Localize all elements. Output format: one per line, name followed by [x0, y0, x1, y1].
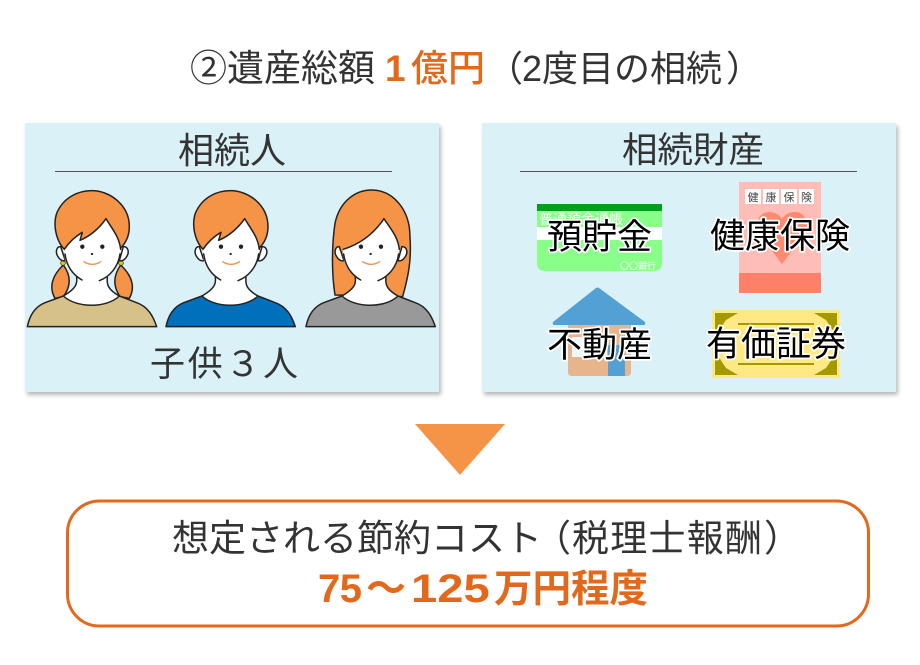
title: 2度目の相続: [522, 48, 722, 89]
icon: health insurance card: 康: [766, 190, 776, 204]
result text: estimated cost: 想定される節約コスト: [172, 518, 542, 559]
icon: health insurance card: 健: [748, 191, 758, 204]
arrow: down triangle: [415, 424, 505, 475]
title: （: [487, 48, 523, 89]
result text: cost amount: [318, 566, 648, 611]
title: 1: [385, 48, 406, 89]
icon: house: [547, 288, 652, 376]
title: ②遺産総額: [190, 48, 375, 89]
person: daughter with long hair: [306, 190, 435, 327]
panel: inherited assets: [482, 123, 896, 392]
result text: estimated cost: （: [534, 518, 571, 559]
icon: health insurance card: 保: [784, 190, 794, 204]
icon: bank passbook: [537, 204, 662, 271]
result text: cost amount: ～: [366, 567, 406, 611]
heading: assets: 相続財産: [622, 130, 764, 170]
title: ）: [726, 48, 762, 89]
result text: estimated cost: 税理士報酬: [572, 518, 762, 559]
panel: heirs: [25, 123, 439, 392]
icon: bank passbook: 普通預金通帳: [539, 211, 623, 227]
icon: health insurance card: [710, 182, 850, 293]
icon: securities: 有価証券: [706, 325, 846, 364]
people illustrations: [27, 190, 435, 327]
icon: securities: [706, 310, 846, 378]
result text: estimated cost: ）: [764, 518, 801, 559]
icon: house: 不動産: [547, 326, 652, 365]
result text: cost amount: 75: [318, 567, 362, 611]
icon: health insurance card: 健康保険: [710, 217, 850, 256]
person: daughter with pigtails: [27, 191, 157, 327]
title: 億円: [411, 48, 485, 89]
heading: heirs: 相続人: [178, 130, 286, 171]
icon: health insurance card: 険: [801, 191, 812, 204]
icon: bank passbook: 〇〇銀行: [620, 260, 656, 271]
result box: [68, 501, 868, 626]
result text: cost amount: 125: [411, 566, 490, 611]
result text: cost amount: 万円程度: [494, 568, 648, 611]
caption: three children: 子供３人: [150, 345, 298, 384]
result text: estimated cost: [172, 518, 801, 559]
icon: bank passbook: 預貯金: [547, 218, 652, 257]
title: [190, 48, 762, 89]
person: son: [166, 191, 295, 327]
